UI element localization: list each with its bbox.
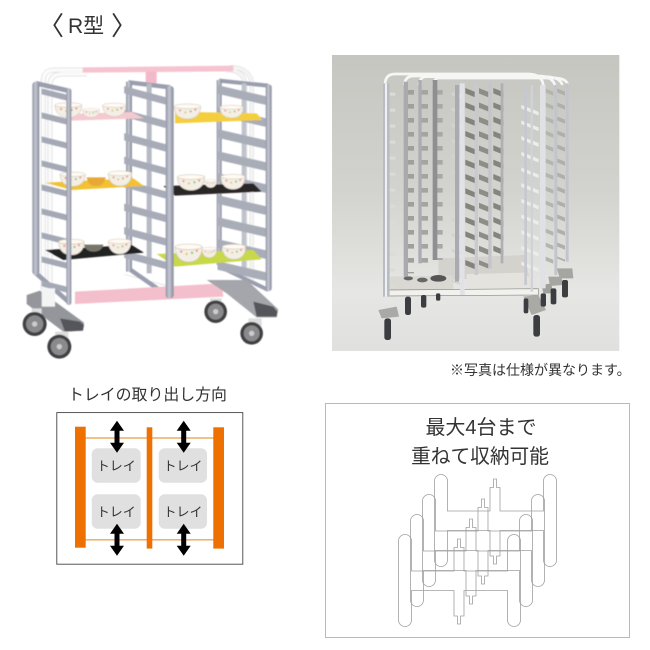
- diagram: tray removal direction: [57, 413, 243, 564]
- tray: upper left: トレイ: [97, 458, 136, 474]
- diagram frame: [57, 413, 243, 564]
- trays: [45, 112, 262, 267]
- photo: four nested carts: [332, 55, 619, 351]
- tray: lower left: [92, 494, 141, 529]
- casters: [23, 298, 263, 359]
- stacking heading: 最大4台まで: [425, 416, 537, 439]
- title: [38, 11, 137, 41]
- center rack frame: [126, 82, 170, 297]
- photo background: [332, 55, 619, 351]
- panel frame: [326, 404, 630, 638]
- arrow: upper right: [177, 421, 191, 453]
- casters: [384, 280, 568, 340]
- rack rungs: [390, 90, 561, 290]
- tray: lower right: トレイ: [163, 504, 203, 520]
- tray: lower left: トレイ: [97, 504, 136, 520]
- stacking heading: 重ねて収納可能: [411, 446, 549, 468]
- tray: upper left: [92, 448, 141, 483]
- title: R型: [68, 15, 104, 38]
- rack uprights: [383, 80, 569, 297]
- stacked cart outlines: [398, 474, 556, 626]
- tray: lower right: [159, 494, 207, 529]
- note: photo differs: ※写真は仕様が異なります。: [450, 362, 631, 378]
- base plates: [378, 255, 573, 318]
- left rack frame: [32, 82, 68, 302]
- bowls: [55, 103, 246, 262]
- right rack frame: [217, 80, 268, 290]
- panel: stacking: [326, 404, 630, 638]
- arrow: lower right: [177, 524, 191, 556]
- title: 〉: [111, 11, 137, 41]
- title: 〈: [38, 11, 64, 41]
- orange uprights: [75, 427, 224, 549]
- tray: upper right: トレイ: [163, 458, 203, 474]
- front uprights: [66, 84, 272, 305]
- photo: R-type cart with trays and bowls: [23, 66, 278, 359]
- stacking heading: [411, 416, 549, 468]
- arrow: upper left: [110, 421, 124, 453]
- top rail: [43, 66, 252, 290]
- tray: upper right: [159, 448, 207, 483]
- rails: [84, 437, 216, 541]
- white top rails: [385, 74, 568, 85]
- base: [27, 280, 278, 332]
- arrow: lower left: [110, 524, 124, 556]
- heading: tray removal direction: トレイの取り出し方向: [68, 386, 227, 404]
